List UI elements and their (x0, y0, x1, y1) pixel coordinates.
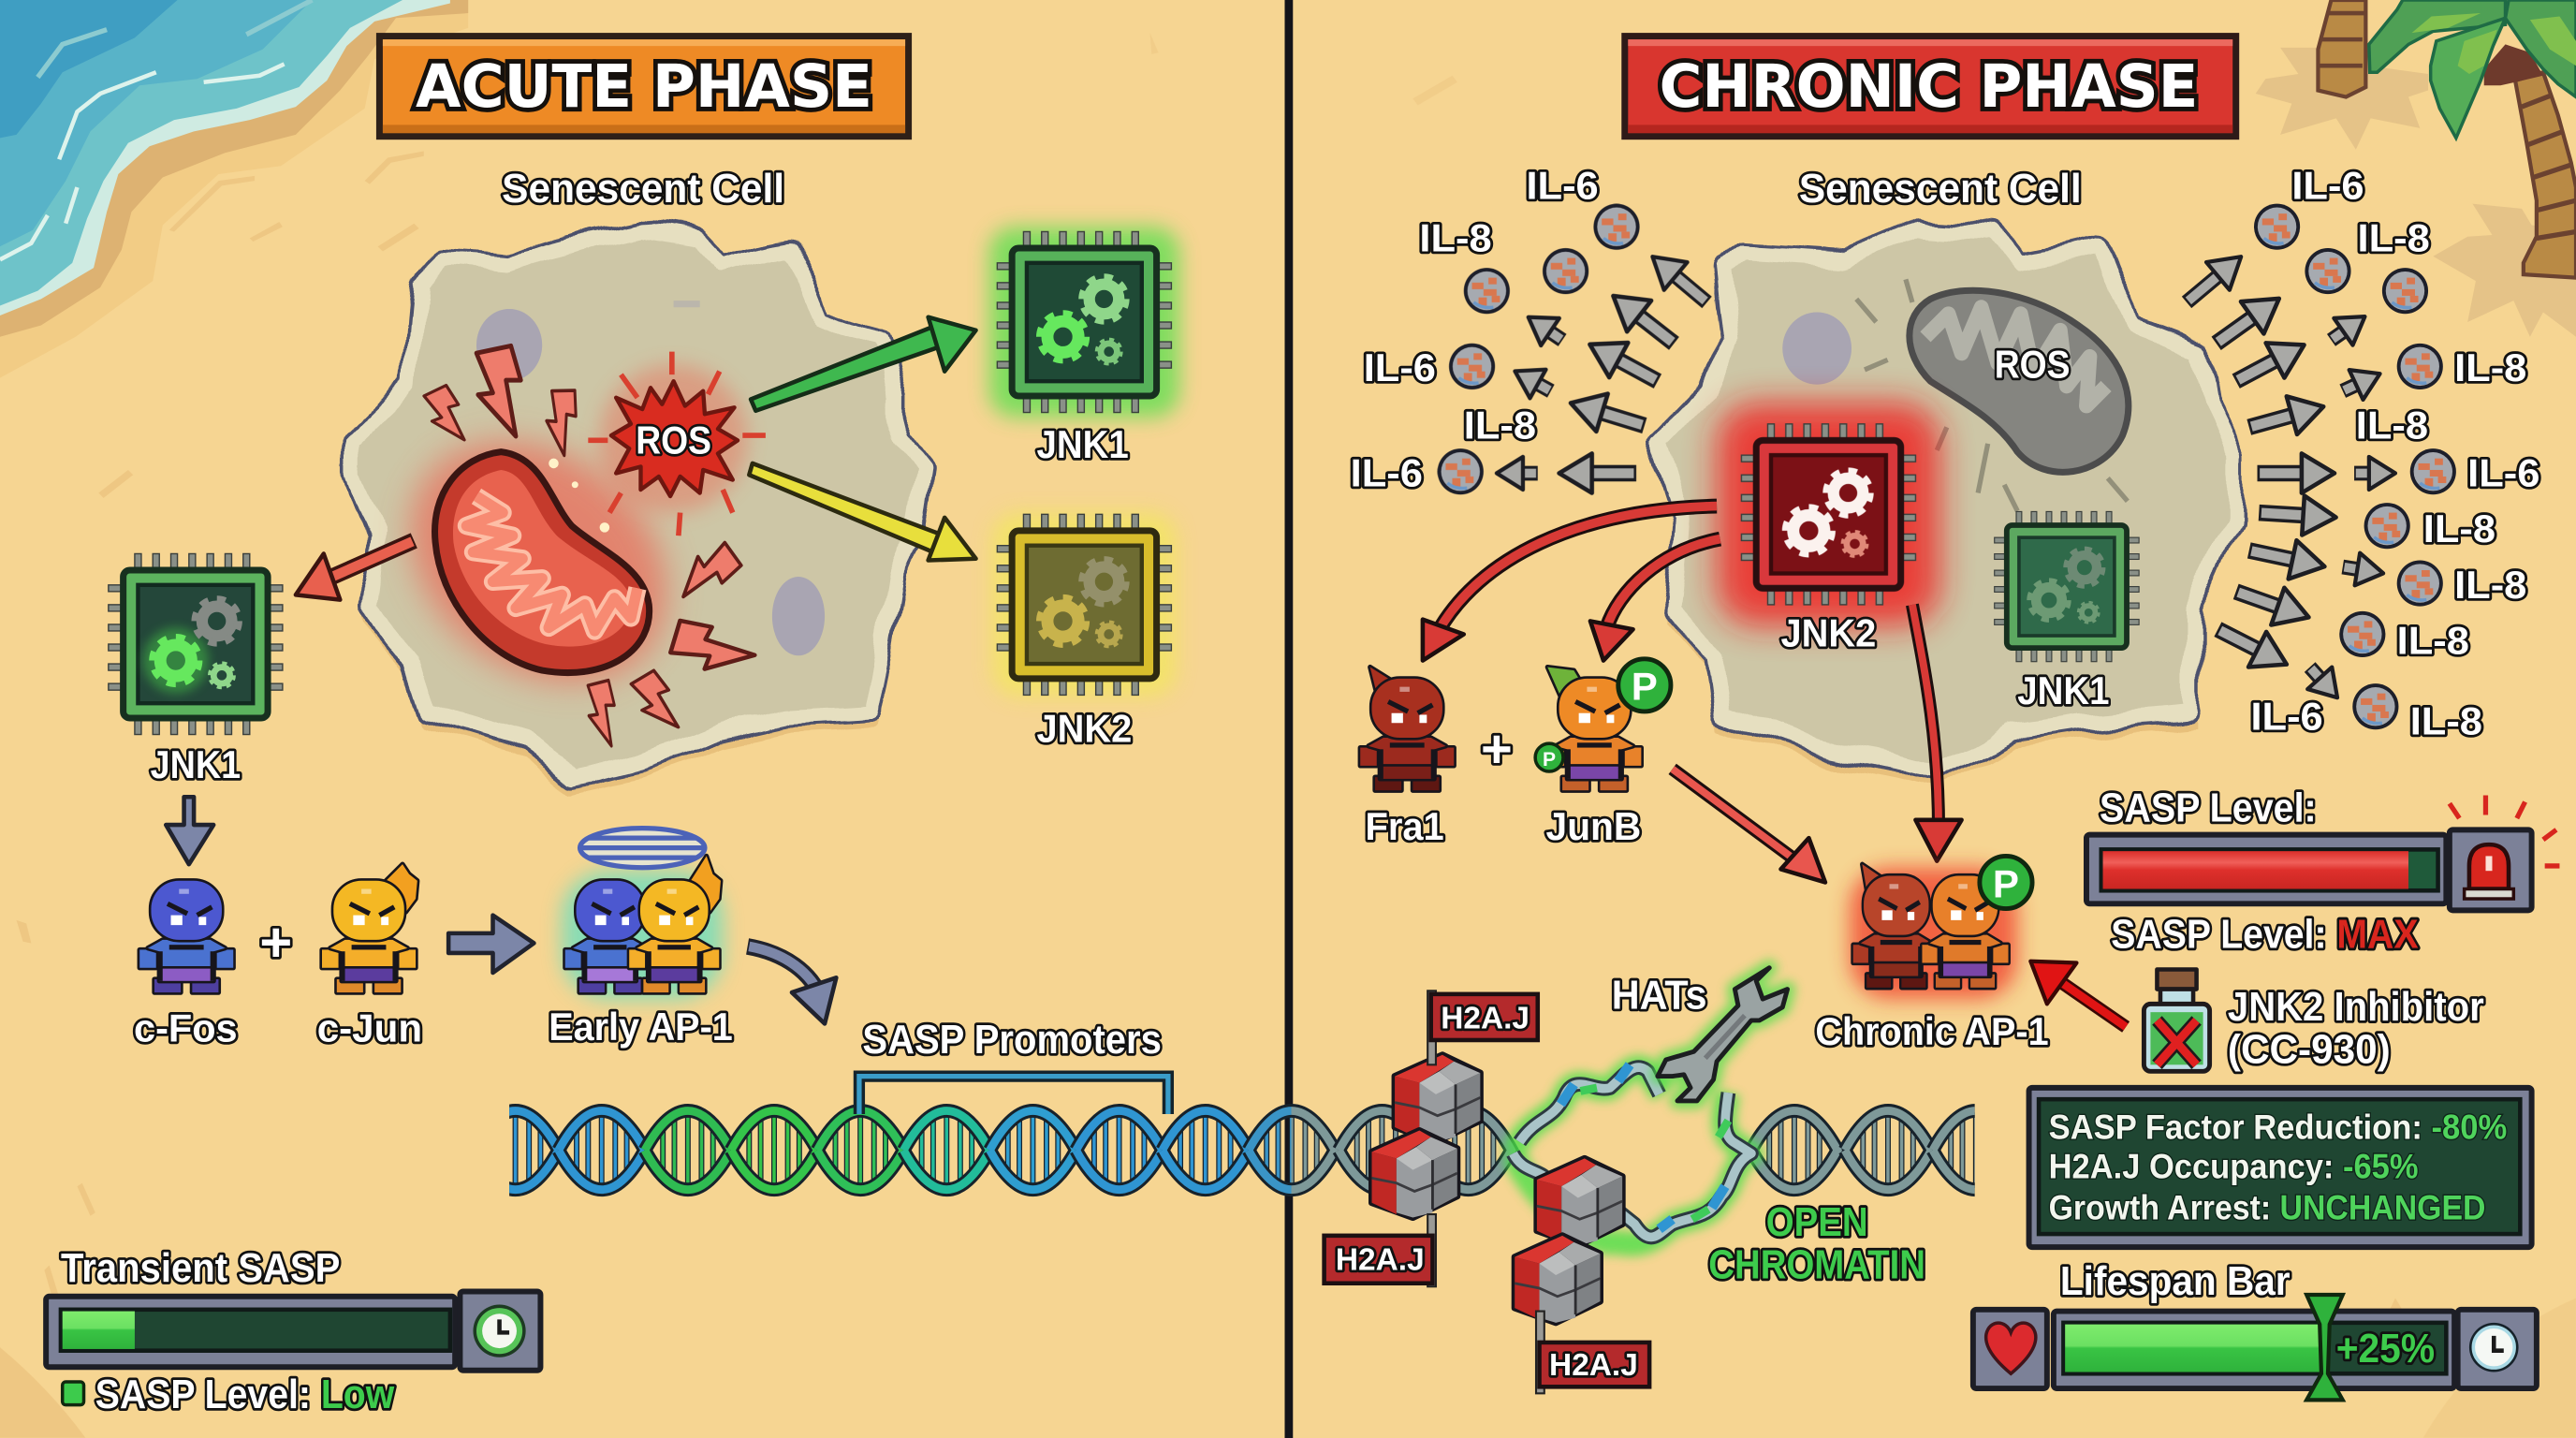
icon: wrench (1658, 968, 1788, 1101)
badge: P large (1618, 659, 1671, 712)
bracket: SASP promoters (859, 1077, 1168, 1114)
nucleus spots (476, 301, 825, 655)
histone stacks (1372, 1055, 1622, 1323)
marker (2306, 1295, 2343, 1400)
arrow: to early AP-1 (448, 916, 534, 973)
palm trees (2256, 0, 2576, 337)
arrow: AP-1 to promoters (748, 946, 836, 1023)
SASP level max: SASP Level: MAX (2111, 912, 2419, 958)
label: JNK1 left: JNK1 (151, 742, 241, 786)
cytokine spheres (1438, 204, 2456, 729)
divider (1284, 0, 1293, 1438)
halo (580, 829, 705, 868)
plus sign: + (259, 911, 292, 974)
label: senescent cell, chronic: Senescent Cell (1799, 166, 2082, 212)
bar: SASP max (2086, 795, 2559, 910)
cytokine labels: IL-6 (1351, 451, 1423, 495)
cytokine labels: IL-6 (1526, 163, 1599, 207)
arrow: JunB to chronic AP-1 (1673, 769, 1825, 882)
curved arrow: JNK2 to Fra1 (1423, 506, 1717, 661)
label: open chromatin: OPEN (1766, 1199, 1868, 1245)
label: c-Fos: c-Fos (134, 1006, 238, 1050)
transient SASP label: Transient SASP (61, 1245, 340, 1291)
arrow: mitochondrion to JNK1 (296, 540, 414, 600)
label: lifespan bar: Lifespan Bar (2060, 1258, 2291, 1304)
cytokine labels (1351, 163, 2539, 743)
character group: chronic AP-1 (1850, 864, 2017, 999)
label: open chromatin: CHROMATIN (1708, 1241, 1925, 1287)
SASP arrows, right (2175, 242, 2395, 709)
cytokine labels: IL-6 (2467, 451, 2539, 495)
cytokine labels: IL-8 (2423, 506, 2496, 550)
title: chronic phase: CHRONIC PHASE (1660, 51, 2198, 121)
nucleus spot (1782, 312, 1852, 385)
bar: lifespan (1973, 1295, 2537, 1400)
ROS burst (588, 352, 766, 536)
open chromatin loop (1513, 1064, 1751, 1244)
flag: H2A.J bottom (1536, 1312, 1649, 1393)
flag: H2A.J left (1325, 1214, 1436, 1286)
character group: early AP-1 (562, 829, 723, 999)
label: HATs: HATs (1612, 973, 1707, 1019)
panel: inhibitor stats: Growth Arrest: UNCHANGED (2049, 1188, 2485, 1226)
panel: acute cell (353, 228, 923, 787)
title: chronic phase (1625, 37, 2236, 137)
label: c-Jun: c-Jun (317, 1006, 422, 1050)
mitochondrion, damaged (363, 392, 714, 732)
SASP level low: SASP Level: Low (95, 1372, 395, 1417)
cytokine labels: IL-8 (1419, 216, 1492, 260)
panel: inhibitor stats (2029, 1088, 2532, 1247)
flag: H2A.J top: H2A.J (1441, 1002, 1530, 1036)
cytokine labels: IL-8 (1464, 404, 1536, 448)
badge: P small: P (1543, 749, 1556, 770)
chip: JNK2 red active (1717, 403, 1940, 626)
arrow: ROS to JNK2 yellow (749, 463, 976, 560)
badge: P chronic: P (1993, 861, 2019, 905)
cytokine labels: IL-8 (2397, 619, 2469, 663)
chip: JNK1 green active, top (989, 227, 1179, 418)
DNA helix, silenced section (1249, 1110, 2019, 1190)
arrow: JNK1 down to c-Fos (166, 797, 213, 864)
label: open chromatin (1708, 1199, 1925, 1287)
label: JNK2 inhibitor (2228, 984, 2484, 1073)
flag: H2A.J bottom: H2A.J (1549, 1348, 1638, 1383)
SASP level label, chronic: SASP Level: (2100, 785, 2317, 831)
curved arrow: JNK2 to chronic AP-1 (1912, 605, 1962, 861)
arrow: ROS to JNK1 green (751, 317, 976, 411)
chip: JNK2 yellow, right (992, 513, 1177, 697)
badge: P chronic (1980, 856, 2032, 909)
panel: inhibitor stats: H2A.J Occupancy: -65% (2049, 1147, 2419, 1185)
cytokine labels: IL-8 (2356, 404, 2428, 448)
cytokine labels: IL-8 (2410, 699, 2482, 743)
cytokine labels: IL-8 (2358, 216, 2430, 260)
cytokine labels: IL-6 (2291, 163, 2364, 207)
icon: alarm (2465, 844, 2513, 899)
debris marks (1856, 279, 2128, 511)
panel: inhibitor stats: SASP Factor Reduction: -80% (2049, 1108, 2507, 1146)
cytokine labels: IL-6 (1364, 345, 1436, 389)
label: JunB: JunB (1546, 804, 1641, 848)
title: acute phase: ACUTE PHASE (416, 51, 872, 121)
panel: chronic cell (1658, 228, 2232, 782)
character: Fra1 (1360, 668, 1454, 790)
label: JNK2 chronic: JNK2 (1781, 611, 1876, 655)
SASP arrows, left (1497, 242, 1719, 493)
label: Fra1: Fra1 (1365, 804, 1444, 848)
flag: H2A.J top (1427, 990, 1538, 1064)
plus sign: + (1481, 720, 1513, 780)
chip: JNK1 left (109, 553, 283, 735)
label: JNK2 right: JNK2 (1036, 706, 1132, 750)
label: JNK2 inhibitor: JNK2 Inhibitor (2228, 984, 2484, 1030)
label: JNK1 top: JNK1 (1036, 422, 1129, 466)
mitochondrion, grey (1910, 290, 2129, 472)
icon: heart (1986, 1323, 2036, 1373)
bar: transient SASP (46, 1292, 540, 1371)
label: chronic AP-1: Chronic AP-1 (1815, 1009, 2049, 1053)
curved arrow: JNK2 to JunB (1590, 539, 1720, 661)
ocean and shoreline (0, 0, 468, 378)
label: ROS grey: ROS (1995, 343, 2070, 387)
bar: lifespan: +25% (2336, 1326, 2435, 1372)
cytokine labels: IL-8 (2454, 563, 2526, 607)
title: acute phase (379, 37, 909, 137)
label: senescent cell, acute: Senescent Cell (502, 166, 784, 212)
lightning bolts (423, 345, 757, 746)
badge: P small (1535, 743, 1563, 771)
label: JNK1 chronic: JNK1 (2017, 668, 2110, 712)
flag: H2A.J left: H2A.J (1336, 1243, 1425, 1278)
DNA helix, active section (473, 1110, 1335, 1190)
cytokine labels: IL-8 (2454, 345, 2526, 389)
badge: P large: P (1632, 665, 1658, 709)
chip: JNK1 muted in chronic cell (1995, 511, 2139, 662)
character: c-Fos (139, 881, 233, 992)
label: early AP-1: Early AP-1 (549, 1005, 733, 1049)
label: SASP promoters: SASP Promoters (862, 1017, 1162, 1063)
ROS burst: ROS (636, 418, 711, 462)
label: JNK2 inhibitor: (CC-930) (2228, 1027, 2391, 1073)
sparks (549, 459, 609, 533)
icon: inhibitor bottle (2144, 970, 2210, 1071)
cytokine labels: IL-6 (2250, 694, 2323, 738)
character: c-Jun (322, 864, 417, 992)
arrow: inhibitor (2030, 961, 2126, 1027)
character: JunB (1547, 668, 1641, 790)
